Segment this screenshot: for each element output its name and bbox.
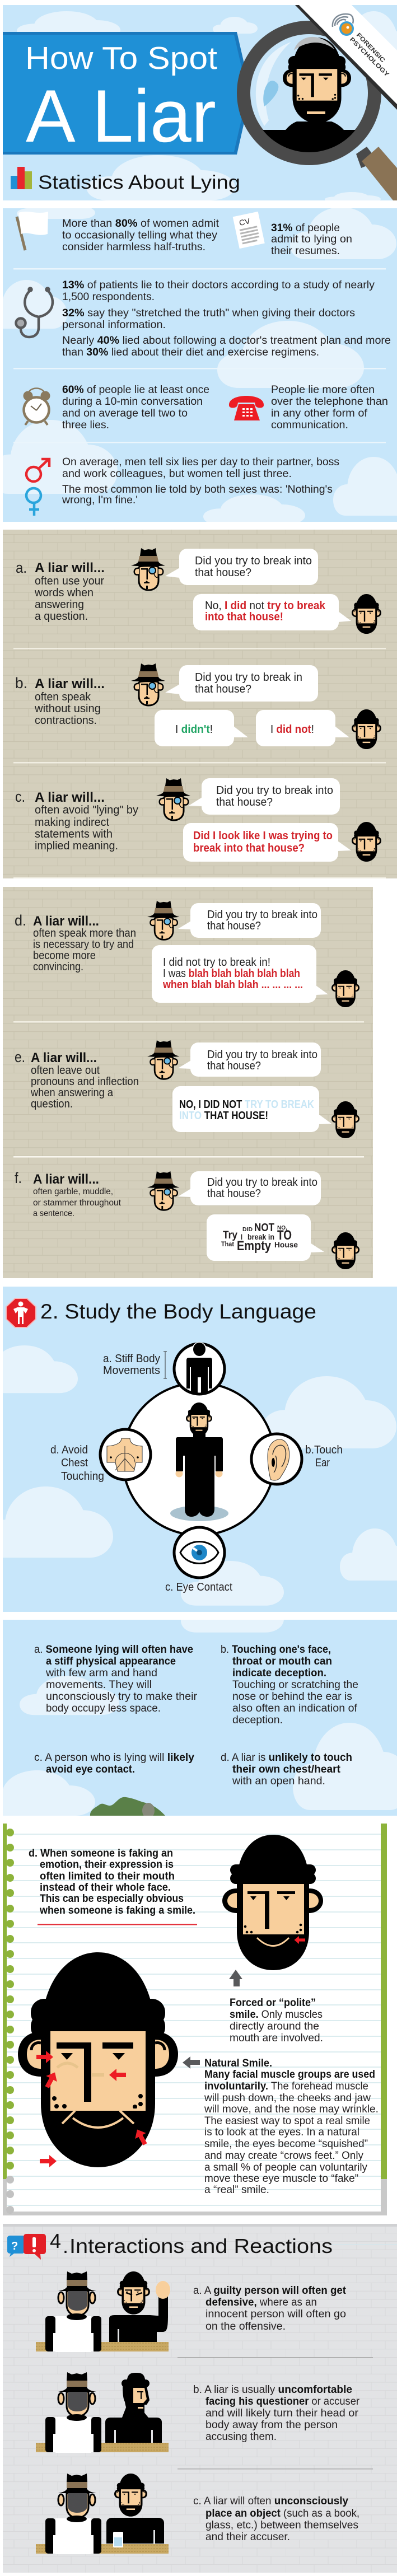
detective b — [131, 663, 165, 705]
icon: female symbol — [26, 488, 41, 516]
item f text: often garble, muddle, — [33, 1187, 113, 1196]
text: conversation — [62, 384, 209, 431]
binding holes — [6, 1829, 14, 2214]
label: d: d. Avoid — [50, 1444, 88, 1456]
text: gender: and work colleagues, but women tell just three. — [62, 468, 292, 480]
icon: glass of water — [113, 2532, 123, 2547]
ribbon: Forensic Psychology — [295, 5, 397, 110]
text: natural smile — [204, 2058, 379, 2196]
speech bubble: garbled answer f: TO — [277, 1228, 292, 1243]
icon: ear — [251, 1434, 302, 1484]
text: telephone: communication. — [271, 419, 348, 431]
arrow: up — [229, 1970, 242, 1986]
text: half-truths: consider harmless half-truths. — [62, 241, 205, 253]
note b: indicate deception. — [232, 1667, 326, 1679]
item e text: question. — [31, 1098, 73, 1110]
text: half-truths: More than 80% of women admit — [62, 218, 219, 230]
speech bubble: question b: that house? — [195, 683, 251, 695]
item a text — [16, 559, 105, 623]
note b: nose or behind the ear is — [232, 1691, 352, 1703]
note b: b. Touching one's face, — [221, 1644, 331, 1656]
icon: question and exclamation bubbles — [7, 2234, 46, 2260]
text: defensive: a. A guilty person will often get — [193, 2285, 347, 2297]
item c text: making indirect — [35, 816, 109, 829]
item e text: pronouns and inflection — [31, 1076, 139, 1088]
icon: alarm clock — [24, 389, 50, 425]
text: conversation: and on average tell two to — [62, 408, 188, 419]
text: doctors: personal information. — [62, 319, 166, 331]
liar b — [352, 709, 381, 749]
text: forced smile: smile. Only muscles — [230, 2009, 323, 2021]
text: telephone: in any other form of — [271, 408, 368, 419]
item a text: often use your — [35, 575, 104, 587]
text: faking emotion: This can be especially obvious — [40, 1893, 184, 1905]
text: natural smile: will move, and the nose may wrinkle. — [204, 2103, 379, 2115]
item e text: when answering a — [30, 1087, 114, 1099]
text: natural smile: a “real” smile. — [204, 2184, 269, 2196]
note a: unconsciously try to make their — [46, 1691, 198, 1703]
panel: study the body language — [0, 1287, 397, 1612]
item b text: often speak — [35, 691, 91, 703]
speech bubble: answer a: into that house! — [205, 611, 283, 623]
item c text — [15, 788, 138, 852]
detective f — [147, 1171, 179, 1210]
item d text: often speak more than — [33, 927, 136, 939]
text: faking emotion — [29, 1848, 195, 1916]
item e text — [15, 1049, 139, 1110]
speech bubble: question f: Did you try to break into — [207, 1176, 317, 1189]
note b: deception. — [232, 1714, 283, 1726]
liar d — [331, 970, 359, 1007]
item d text: is necessary to try and — [33, 938, 134, 951]
text: half-truths: to occasionally telling what they — [62, 230, 218, 241]
text: object: and their accuser. — [205, 2531, 290, 2543]
item c text: A liar will... — [35, 790, 105, 805]
note a — [34, 1644, 198, 1714]
illustration: object barrier pair — [36, 2474, 169, 2554]
text: doctors — [62, 279, 391, 358]
text: uncomfortable: and will likely turn their head or — [205, 2407, 359, 2419]
text: defensive: defensive, where as an — [205, 2297, 317, 2308]
icon: CV document — [233, 212, 265, 249]
speech bubble: question d — [178, 903, 321, 938]
item d text — [15, 912, 136, 973]
speech bubble: question a — [165, 549, 318, 585]
speech bubble: I didn't: I didn't! — [175, 723, 213, 736]
item d text: convincing. — [33, 961, 83, 973]
text: natural smile: and may create “crows feet.” Only — [204, 2150, 363, 2162]
text: uncomfortable: body away from the person — [205, 2419, 338, 2431]
text: defensive: innocent person will often go — [205, 2308, 346, 2320]
logo text: FORENSIC — [355, 32, 386, 64]
item f text — [15, 1170, 122, 1218]
label: b: b.Touch — [305, 1444, 343, 1456]
speech bubble: garbled answer f: I — [241, 1232, 242, 1241]
icon: magnifying glass with liar — [237, 21, 397, 200]
panel: notebook smiles — [3, 1824, 387, 2215]
speech bubble: question c — [189, 778, 340, 815]
icon: eye — [174, 1527, 225, 1578]
speech bubble: I didn't — [155, 710, 248, 746]
note b — [221, 1644, 358, 1726]
illustration: turning away pair — [36, 2372, 169, 2453]
text: object — [193, 2495, 359, 2543]
text: doctors: than 30% lied about their diet and exercise regimens. — [62, 347, 319, 358]
text: doctors: Nearly 40% lied about following a doctor's treatment plan and more — [62, 335, 391, 347]
text: faking emotion: often limited to their mouth — [40, 1871, 175, 1882]
note a: a stiff physical appearance — [46, 1656, 176, 1667]
speech bubble: question f — [178, 1171, 321, 1205]
text: gender: The most common lie told by both sexes was: 'Nothing's — [62, 484, 333, 495]
text: telephone — [271, 384, 388, 431]
text: gender — [62, 456, 339, 506]
note c — [34, 1752, 194, 1775]
label: d: Chest — [61, 1457, 88, 1469]
text: uncomfortable: facing his questioner or accuser — [205, 2396, 360, 2407]
arrow: left — [183, 2056, 200, 2069]
icon: stethoscope — [16, 288, 53, 337]
item b text: contractions. — [35, 714, 97, 727]
speech bubble: question a: that house? — [195, 567, 251, 579]
item e text: often leave out — [31, 1064, 100, 1077]
text: natural smile: involuntarily. The forehead muscle — [204, 2081, 368, 2092]
item b text: b. — [15, 675, 27, 691]
speech bubble: answer c: Did I look like I was trying to — [193, 830, 333, 842]
label: b: Ear — [315, 1457, 330, 1469]
text: natural smile: The easiest way to spot a real smile — [204, 2115, 370, 2127]
item e text: A liar will... — [31, 1050, 97, 1065]
detective e — [147, 1040, 179, 1079]
text: natural smile: a small % of people can voluntarily — [204, 2162, 367, 2173]
text: doctors: 32% say they "stretched the truth" when giving their doctors — [62, 307, 355, 319]
heading: interactions and reactions — [50, 2229, 333, 2257]
panel: body language notes — [3, 1620, 397, 1816]
speech bubble: answer e: INTO THAT HOUSE! — [179, 1110, 268, 1122]
label: d: Touching — [61, 1470, 104, 1483]
icon: chest — [100, 1429, 151, 1480]
label: b — [305, 1444, 343, 1469]
text: natural smile: is to look at the eyes. In a natural — [204, 2126, 359, 2138]
speech bubble: garbled answer f: NO, — [277, 1225, 287, 1231]
text: resumes: admit to lying on — [271, 233, 352, 245]
text: half-truths — [62, 218, 219, 253]
text: natural smile: will push down, the cheeks and jaw — [204, 2092, 371, 2104]
text: conversation: three lies. — [62, 419, 109, 431]
title — [25, 40, 217, 158]
note b: also often an indication of — [232, 1703, 358, 1714]
panel: header — [3, 5, 397, 202]
speech bubble: answer d: when blah blah blah ... ... ... ... — [162, 979, 303, 991]
text: resumes — [271, 222, 352, 257]
item b text — [15, 675, 105, 727]
icon: bar chart — [11, 167, 32, 189]
heading: interactions and reactions: . — [63, 2234, 68, 2257]
text: uncomfortable: accusing them. — [205, 2431, 277, 2443]
speech bubble: answer c: break into that house? — [193, 842, 305, 854]
item d text: d. — [15, 912, 26, 929]
detective c — [156, 778, 190, 820]
text: conversation: during a 10-min conversation — [62, 396, 203, 408]
face: forced smile — [222, 1835, 323, 1970]
text: object: place an object (such as a book, — [205, 2508, 359, 2519]
item a text: A liar will... — [35, 560, 105, 576]
speech bubble: question d: that house? — [207, 920, 261, 932]
note a: with few arm and hand — [45, 1667, 157, 1679]
text: gender: wrong, I'm fine.' — [62, 494, 138, 506]
icon: stiff body — [174, 1342, 225, 1394]
speech bubble: answer d — [152, 945, 328, 1003]
speech bubble: question c: that house? — [216, 796, 273, 808]
item c text: often avoid "lying" by — [35, 804, 138, 816]
note c: avoid eye contact. — [46, 1764, 135, 1775]
heading: interactions and reactions: 4 — [50, 2229, 61, 2252]
speech bubble: question b — [165, 665, 318, 702]
item a text: words when — [34, 587, 94, 599]
note b: Touching or scratching the — [232, 1679, 358, 1691]
panel: statistics — [0, 199, 397, 525]
speech bubble: answer a: No, I did not try to break — [205, 600, 326, 612]
liar f — [331, 1232, 359, 1269]
label: d — [50, 1444, 104, 1483]
item f text: a sentence. — [33, 1209, 74, 1218]
logo text — [348, 32, 390, 78]
liar e — [331, 1101, 359, 1138]
text: object: glass, etc.) between themselves — [205, 2519, 358, 2531]
item c text: c. — [15, 788, 25, 805]
speech bubble: answer e — [172, 1086, 331, 1132]
text: natural smile: Many facial muscle groups are used — [204, 2069, 375, 2081]
item d text: become more — [33, 950, 96, 962]
speech bubble: I did not: I did not! — [270, 723, 314, 736]
speech bubble: answer d: I did not try to break in! — [163, 956, 270, 969]
banner — [3, 32, 251, 155]
icon: fingerprint logo — [333, 14, 354, 36]
text: faking emotion: when someone is faking a smile. — [39, 1905, 195, 1916]
item f text: or stammer throughout — [33, 1198, 122, 1208]
speech bubble: garbled answer f: Try — [223, 1229, 237, 1241]
title: A Liar — [26, 75, 216, 158]
item b text: A liar will... — [35, 676, 105, 691]
speech bubble: garbled answer f: DID — [242, 1227, 253, 1233]
item f text: A liar will... — [33, 1172, 99, 1187]
text: defensive — [193, 2285, 347, 2332]
speech bubble: question e — [178, 1042, 321, 1077]
text: doctors: 13% of patients lie to their doctors according to a study of nearly — [62, 279, 375, 291]
panel: interactions and reactions — [3, 2224, 397, 2573]
text: telephone: over the telephone than — [271, 396, 388, 408]
detective d — [147, 901, 179, 939]
item d text: A liar will... — [33, 914, 99, 929]
panel: a liar will a-c — [3, 530, 397, 878]
speech bubble: garbled answer f: Empty — [237, 1238, 272, 1254]
text: natural smile: move these eye muscle to “fake” — [204, 2173, 358, 2185]
note d: d. A liar is unlikely to touch — [221, 1752, 352, 1764]
speech bubble: question e: that house? — [207, 1060, 261, 1072]
title: How To Spot — [25, 40, 217, 76]
panel: a liar will d-f — [3, 887, 373, 1278]
label: a — [103, 1352, 167, 1378]
note a: a. Someone lying will often have — [34, 1644, 193, 1656]
speech bubble: answer c — [183, 823, 351, 862]
label: a: a. Stiff Body — [103, 1353, 160, 1365]
text: doctors: 1,500 respondents. — [62, 291, 155, 303]
speech bubble: question c: Did you try to break into — [216, 784, 333, 797]
detective a — [131, 548, 165, 590]
speech bubble: question e: Did you try to break into — [207, 1049, 317, 1061]
note c: c. A person who is lying will likely — [34, 1752, 194, 1764]
text: defensive: on the offensive. — [205, 2321, 286, 2332]
speech bubble: question b: Did you try to break in — [195, 671, 302, 684]
text: natural smile: smile, the eyes become “squished” — [204, 2138, 368, 2150]
speech bubble: answer d: I was blah blah blah blah blah — [163, 967, 300, 980]
note d — [221, 1752, 352, 1787]
icon: stop sign — [6, 1298, 36, 1327]
speech bubble: I did not — [256, 710, 349, 746]
face: natural smile — [18, 1952, 178, 2167]
item a text: a. — [16, 559, 27, 576]
note b: throat or mouth can — [232, 1656, 332, 1667]
note a: movements. They will — [46, 1679, 152, 1691]
speech bubble: garbled answer f: That — [221, 1240, 234, 1248]
item a text: a question. — [35, 610, 88, 623]
label: c: c. Eye Contact — [165, 1581, 232, 1593]
liar a — [352, 594, 381, 634]
icon: red telephone — [229, 396, 264, 420]
text: uncomfortable: b. A liar is usually uncomfortable — [193, 2384, 352, 2396]
text: telephone: People lie more often — [271, 384, 375, 396]
speech bubble: question a: Did you try to break into — [195, 555, 312, 567]
text: gender: On average, men tell six lies per day to their partner, boss — [62, 456, 339, 468]
icon: CV document: CV — [239, 216, 251, 227]
text: forced smile: Forced or “polite” — [230, 1997, 316, 2009]
item f text: f. — [15, 1170, 22, 1186]
diagram: body language — [50, 1342, 343, 1593]
speech bubble: garbled answer f: NOT — [254, 1222, 274, 1234]
item c text: implied meaning. — [35, 840, 118, 852]
note d: with an open hand. — [232, 1775, 325, 1787]
speech bubble: answer e: NO, I DID NOT TRY TO BREAK — [179, 1098, 314, 1111]
text: faking emotion: emotion, their expression is — [40, 1859, 174, 1871]
item b text: without using — [34, 703, 101, 715]
text: object: c. A liar will often unconsciously — [193, 2495, 348, 2507]
text: conversation: 60% of people lie at least once — [62, 384, 209, 396]
item e text: e. — [15, 1049, 25, 1065]
heading: study the body language: 2. Study the Body Language — [40, 1300, 316, 1323]
text: natural smile: Natural Smile. — [204, 2058, 272, 2069]
text: forced smile: directly around the — [230, 2021, 319, 2032]
note a: body occupy less space. — [46, 1703, 161, 1714]
item a text: answering — [35, 599, 84, 611]
text: resumes: 31% of people — [271, 222, 340, 234]
icon: white flag — [17, 212, 48, 250]
text: uncomfortable — [193, 2384, 360, 2443]
speech bubble: garbled answer f: break in — [247, 1232, 274, 1241]
icon: question and exclamation bubbles: ? — [11, 2240, 18, 2252]
text: resumes: their resumes. — [271, 245, 340, 257]
note d: their own chest/heart — [232, 1764, 341, 1775]
speech bubble: answer a — [193, 594, 351, 630]
text: forced smile: mouth are involved. — [230, 2032, 323, 2044]
illustration: defensive pair — [36, 2271, 170, 2352]
text: forced smile — [230, 1997, 323, 2044]
logo text: PSYCHOLOGY — [348, 36, 390, 78]
speech bubble: question f: that house? — [207, 1188, 261, 1200]
heading: interactions and reactions: Interactions and Reactions — [69, 2234, 333, 2257]
text: faking emotion: instead of their whole face. — [40, 1882, 171, 1894]
speech bubble: garbled answer f: House — [274, 1240, 298, 1249]
item c text: statements with — [35, 828, 113, 840]
speech bubble: question d: Did you try to break into — [207, 909, 317, 921]
label: a: Movements — [103, 1364, 160, 1377]
heading: statistics about lying: Statistics About Lying — [38, 172, 240, 193]
speech bubble: garbled answer f — [207, 1214, 324, 1261]
text: faking emotion: d. When someone is faking an — [29, 1848, 173, 1859]
figure: liar full body — [170, 1402, 228, 1521]
liar c — [352, 822, 381, 862]
icon: male symbol — [26, 459, 49, 481]
